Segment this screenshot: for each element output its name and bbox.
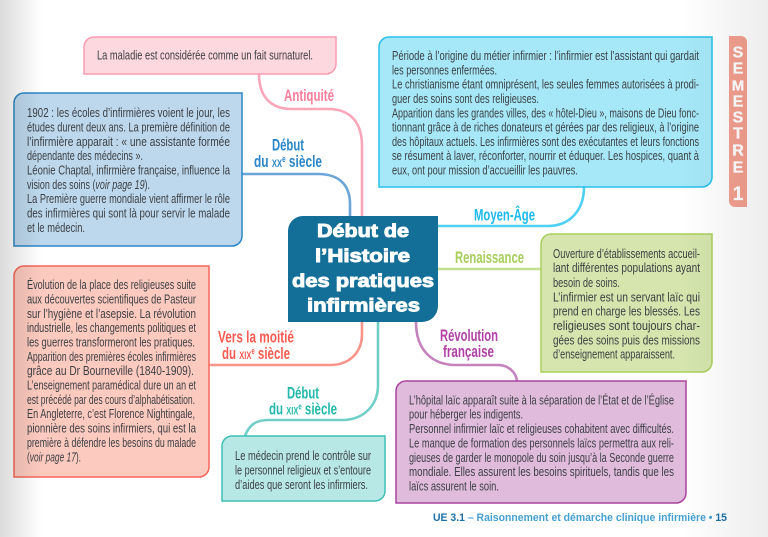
tab: Semestre 1: S <box>733 44 744 62</box>
panel: Renaissance: gées des soins puis des missions <box>553 334 700 348</box>
panel: Début du XXe siècle: l’infirmière apparait : « une assistante formée <box>27 135 230 149</box>
panel: Renaissance <box>541 234 712 372</box>
panel: Vers la moitié du XIXe siècle: première à défendre les besoins du malade <box>27 436 196 450</box>
panel: Révolution française: laïcs assurent le soin. <box>409 480 499 494</box>
panel: Vers la moitié du XIXe siècle: industrielle, les changements politiques et <box>27 321 196 335</box>
label: Vers la moitié du XIXe siècle <box>218 328 294 363</box>
panel: Révolution française: pour héberger les indigents. <box>409 408 523 422</box>
label: Renaissance: Renaissance <box>455 248 524 267</box>
panel: Moyen-Âge <box>379 37 712 187</box>
label: Vers la moitié du XIXe siècle: siècle <box>255 344 290 363</box>
panel: Vers la moitié du XIXe siècle: aux découvertes scientifiques de Pasteur <box>27 292 196 306</box>
panel: Début du XXe siècle: 1902 : les écoles d’infirmières voient le jour, les <box>27 106 230 120</box>
tab: Semestre 1: M <box>732 78 744 94</box>
panel: Vers la moitié du XIXe siècle: pionnière des soins infirmiers, qui est la <box>27 422 196 436</box>
connector: Vers la moitié du XIXe siècle <box>209 322 362 365</box>
panel: Renaissance: Ouverture d’établissements accueil- <box>553 247 700 261</box>
panel: Début du XXe siècle: des infirmières qui sont là pour servir le malade <box>27 206 230 220</box>
panel: Vers la moitié du XIXe siècle: (voir page 17). <box>27 450 81 464</box>
panel: Début du XXe siècle: et le médecin. <box>27 221 85 235</box>
title: central box: Début de <box>317 221 409 241</box>
panel: Renaissance: L’infirmier est un servant laïc qui <box>553 290 700 304</box>
panel: Début du XIXe siècle <box>222 436 385 501</box>
label: Début du XXe siècle <box>254 136 322 171</box>
panel: Vers la moitié du XIXe siècle: Évolution de la place des religieuses suite <box>27 277 196 292</box>
title: central box: des pratiques <box>292 271 434 291</box>
panel: Moyen-Âge: guer des soins sont des religieuses. <box>392 92 539 106</box>
connector: Révolution française <box>416 322 517 381</box>
panel: Vers la moitié du XIXe siècle: grâce au Dr Bourneville (1840-1909). <box>27 364 194 378</box>
tab: Semestre 1: S <box>733 110 744 126</box>
panel: Vers la moitié du XIXe siècle <box>14 266 209 477</box>
panel: Révolution française: L’hôpital laïc apparaît suite à la séparation de l’État et de l’Église <box>409 392 674 408</box>
panel: Antiquité <box>84 37 336 74</box>
panel: Début du XXe siècle: Léonie Chaptal, infirmière française, influence la <box>27 164 230 178</box>
panel: Antiquité: La maladie est considérée comme un fait surnaturel. <box>97 48 313 62</box>
panel: Vers la moitié du XIXe siècle: sur l’hygiène et l’asepsie. La révolution <box>27 307 196 321</box>
panel: Renaissance: besoin de soins. <box>553 276 620 290</box>
panel: Révolution française: mondiale. Elles assurent les besoins spirituels, tandis que les <box>409 465 674 479</box>
label: Antiquité: Antiquité <box>284 86 334 105</box>
panel: Vers la moitié du XIXe siècle: Apparition des premières écoles infirmières <box>27 350 196 364</box>
panel: Révolution française: Personnel infirmier laïc et religieuses cohabitent avec difficultés. <box>409 422 674 436</box>
label: Début du XXe siècle: e <box>282 154 286 164</box>
tab: Semestre 1: E <box>733 94 744 110</box>
title: central box: infirmières <box>307 296 420 316</box>
footer: page reference: UE 3.1 – Raisonnement et démarche clinique infirmière • 15 <box>433 512 727 524</box>
label: Début du XXe siècle: du XX <box>254 152 287 171</box>
panel: Début du XXe siècle: vision des soins (voir page 19). <box>27 178 150 192</box>
tab: Semestre 1: 1 <box>733 184 744 205</box>
panel: Révolution française <box>396 381 686 503</box>
label: Révolution française: française <box>443 342 494 361</box>
label: Début du XXe siècle: siècle <box>286 152 322 171</box>
panel: Début du XXe siècle: études durent deux ans. La première définition de <box>27 120 230 134</box>
panel: Renaissance: prend en charge les blessés. Les <box>553 304 700 318</box>
panel: Début du XIXe siècle: Le médecin prend le contrôle sur <box>235 449 371 463</box>
connector: Début du XIXe siècle <box>245 322 378 436</box>
label: Vers la moitié du XIXe siècle: Vers la moitié <box>218 328 294 346</box>
panel: Moyen-Âge: les personnes enfermées. <box>392 64 497 78</box>
label: Vers la moitié du XIXe siècle: e <box>251 346 255 356</box>
panel: Vers la moitié du XIXe siècle: les guerres transformeront les pratiques. <box>27 336 195 350</box>
panel: Vers la moitié du XIXe siècle: L’enseignement paramédical dure un an et <box>27 378 196 392</box>
panel: Début du XIXe siècle: d’aides que seront les infirmiers. <box>235 478 368 492</box>
title: central box <box>288 216 438 322</box>
panel: Vers la moitié du XIXe siècle: est précédé par des cours d’alphabétisation. <box>27 393 195 407</box>
tab: Semestre 1: E <box>733 60 744 78</box>
label: Vers la moitié du XIXe siècle: du XIX <box>222 344 257 363</box>
panel: Moyen-Âge: eux, ont pour mission d’accueillir les pauvres. <box>392 164 578 178</box>
panel: Renaissance: lant différentes populations ayant <box>553 261 700 275</box>
panel: Début du XIXe siècle: le personnel religieux et s’entoure <box>235 464 371 478</box>
panel: Vers la moitié du XIXe siècle: En Angleterre, c’est Florence Nightingale, <box>27 407 195 421</box>
panel: Début du XXe siècle: La Première guerre mondiale vient affirmer le rôle <box>27 192 230 206</box>
label: Révolution française <box>440 326 498 361</box>
panel: Révolution française: gieuses de garder le monopole du soin jusqu’à la Seconde guerre <box>409 451 674 465</box>
label: Révolution française: Révolution <box>440 326 498 345</box>
label: Début du XIXe siècle: du XIX <box>269 400 304 418</box>
panel: Renaissance: d’enseignement apparaissent. <box>553 348 675 362</box>
connector: Renaissance <box>438 268 541 270</box>
label: Début du XIXe siècle: e <box>298 402 302 412</box>
label: Début du XIXe siècle: siècle <box>302 400 337 418</box>
tab: Semestre 1: R <box>732 142 744 160</box>
connector: Début du XXe siècle <box>242 174 350 216</box>
connector: Moyen-Âge <box>438 187 584 226</box>
title: central box: l’Histoire <box>315 246 410 266</box>
label: Moyen-Âge: Moyen-Âge <box>474 206 535 224</box>
panel: Début du XXe siècle <box>14 93 242 246</box>
tab: Semestre 1: T <box>733 126 743 142</box>
tab: Semestre 1: E <box>733 160 744 176</box>
label: Début du XXe siècle: Début <box>272 136 304 154</box>
label: Début du XIXe siècle: Début <box>287 384 319 402</box>
connector: Antiquité <box>259 74 362 216</box>
panel: Début du XXe siècle: dépendante des médecins ». <box>27 149 143 163</box>
panel: Révolution française: Le manque de formation des personnels laïcs permettra aux reli- <box>409 436 674 450</box>
tab: Semestre 1 <box>729 36 747 207</box>
panel: Renaissance: religieuses sont toujours char- <box>553 319 700 333</box>
label: Début du XIXe siècle <box>269 384 337 418</box>
